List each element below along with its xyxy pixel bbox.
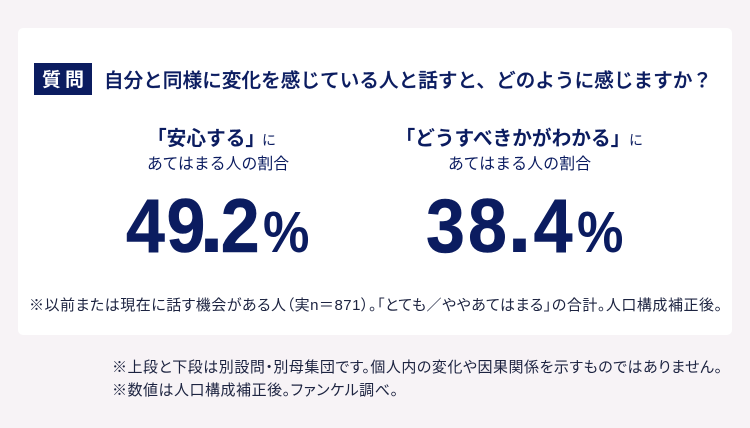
left stat: label: に bbox=[262, 132, 276, 148]
right stat: 38.4%: % bbox=[577, 199, 623, 265]
footnotes below card: ※上段と下段は別設問・別母集団です。個人内の変化や因果関係を示すものではありません。 bbox=[112, 359, 722, 376]
left stat: 49.2%: . bbox=[199, 172, 224, 272]
right stat: 38.4%: 4 bbox=[534, 184, 573, 269]
right stat: label bbox=[396, 127, 643, 173]
left stat: label: あてはまる人の割合 bbox=[147, 155, 289, 173]
left stat: 49.2% bbox=[126, 172, 309, 272]
question badge bbox=[34, 63, 92, 95]
card footnote: ※以前または現在に話す機会がある人（実n＝871）。「とても／ややあてはまる」の合計。人口構成補正後。 bbox=[29, 297, 722, 314]
question badge: 質問 bbox=[42, 69, 84, 91]
left stat: label: 「安心する」 bbox=[147, 128, 265, 150]
right stat: label: 「どうすべきかがわかる」 bbox=[396, 127, 630, 150]
right stat: label: に bbox=[629, 132, 643, 148]
left stat: 49.2%: 2 bbox=[221, 184, 260, 269]
right stat: label: あてはまる人の割合 bbox=[448, 155, 591, 173]
panel: white survey card bbox=[18, 28, 732, 335]
right stat: 38.4% bbox=[426, 172, 623, 272]
footnotes below card bbox=[112, 359, 722, 399]
footnotes below card: ※数値は人口構成補正後。ファンケル調べ。 bbox=[112, 382, 398, 399]
question heading: 自分と同様に変化を感じている人と話すと、どのように感じますか？ bbox=[104, 69, 712, 92]
left stat: 49.2%: % bbox=[263, 199, 309, 265]
right stat: 38.4%: 38 bbox=[426, 184, 507, 269]
right stat: 38.4%: . bbox=[507, 172, 532, 272]
left stat: label bbox=[147, 128, 289, 173]
left stat: 49.2%: 49 bbox=[126, 184, 205, 269]
